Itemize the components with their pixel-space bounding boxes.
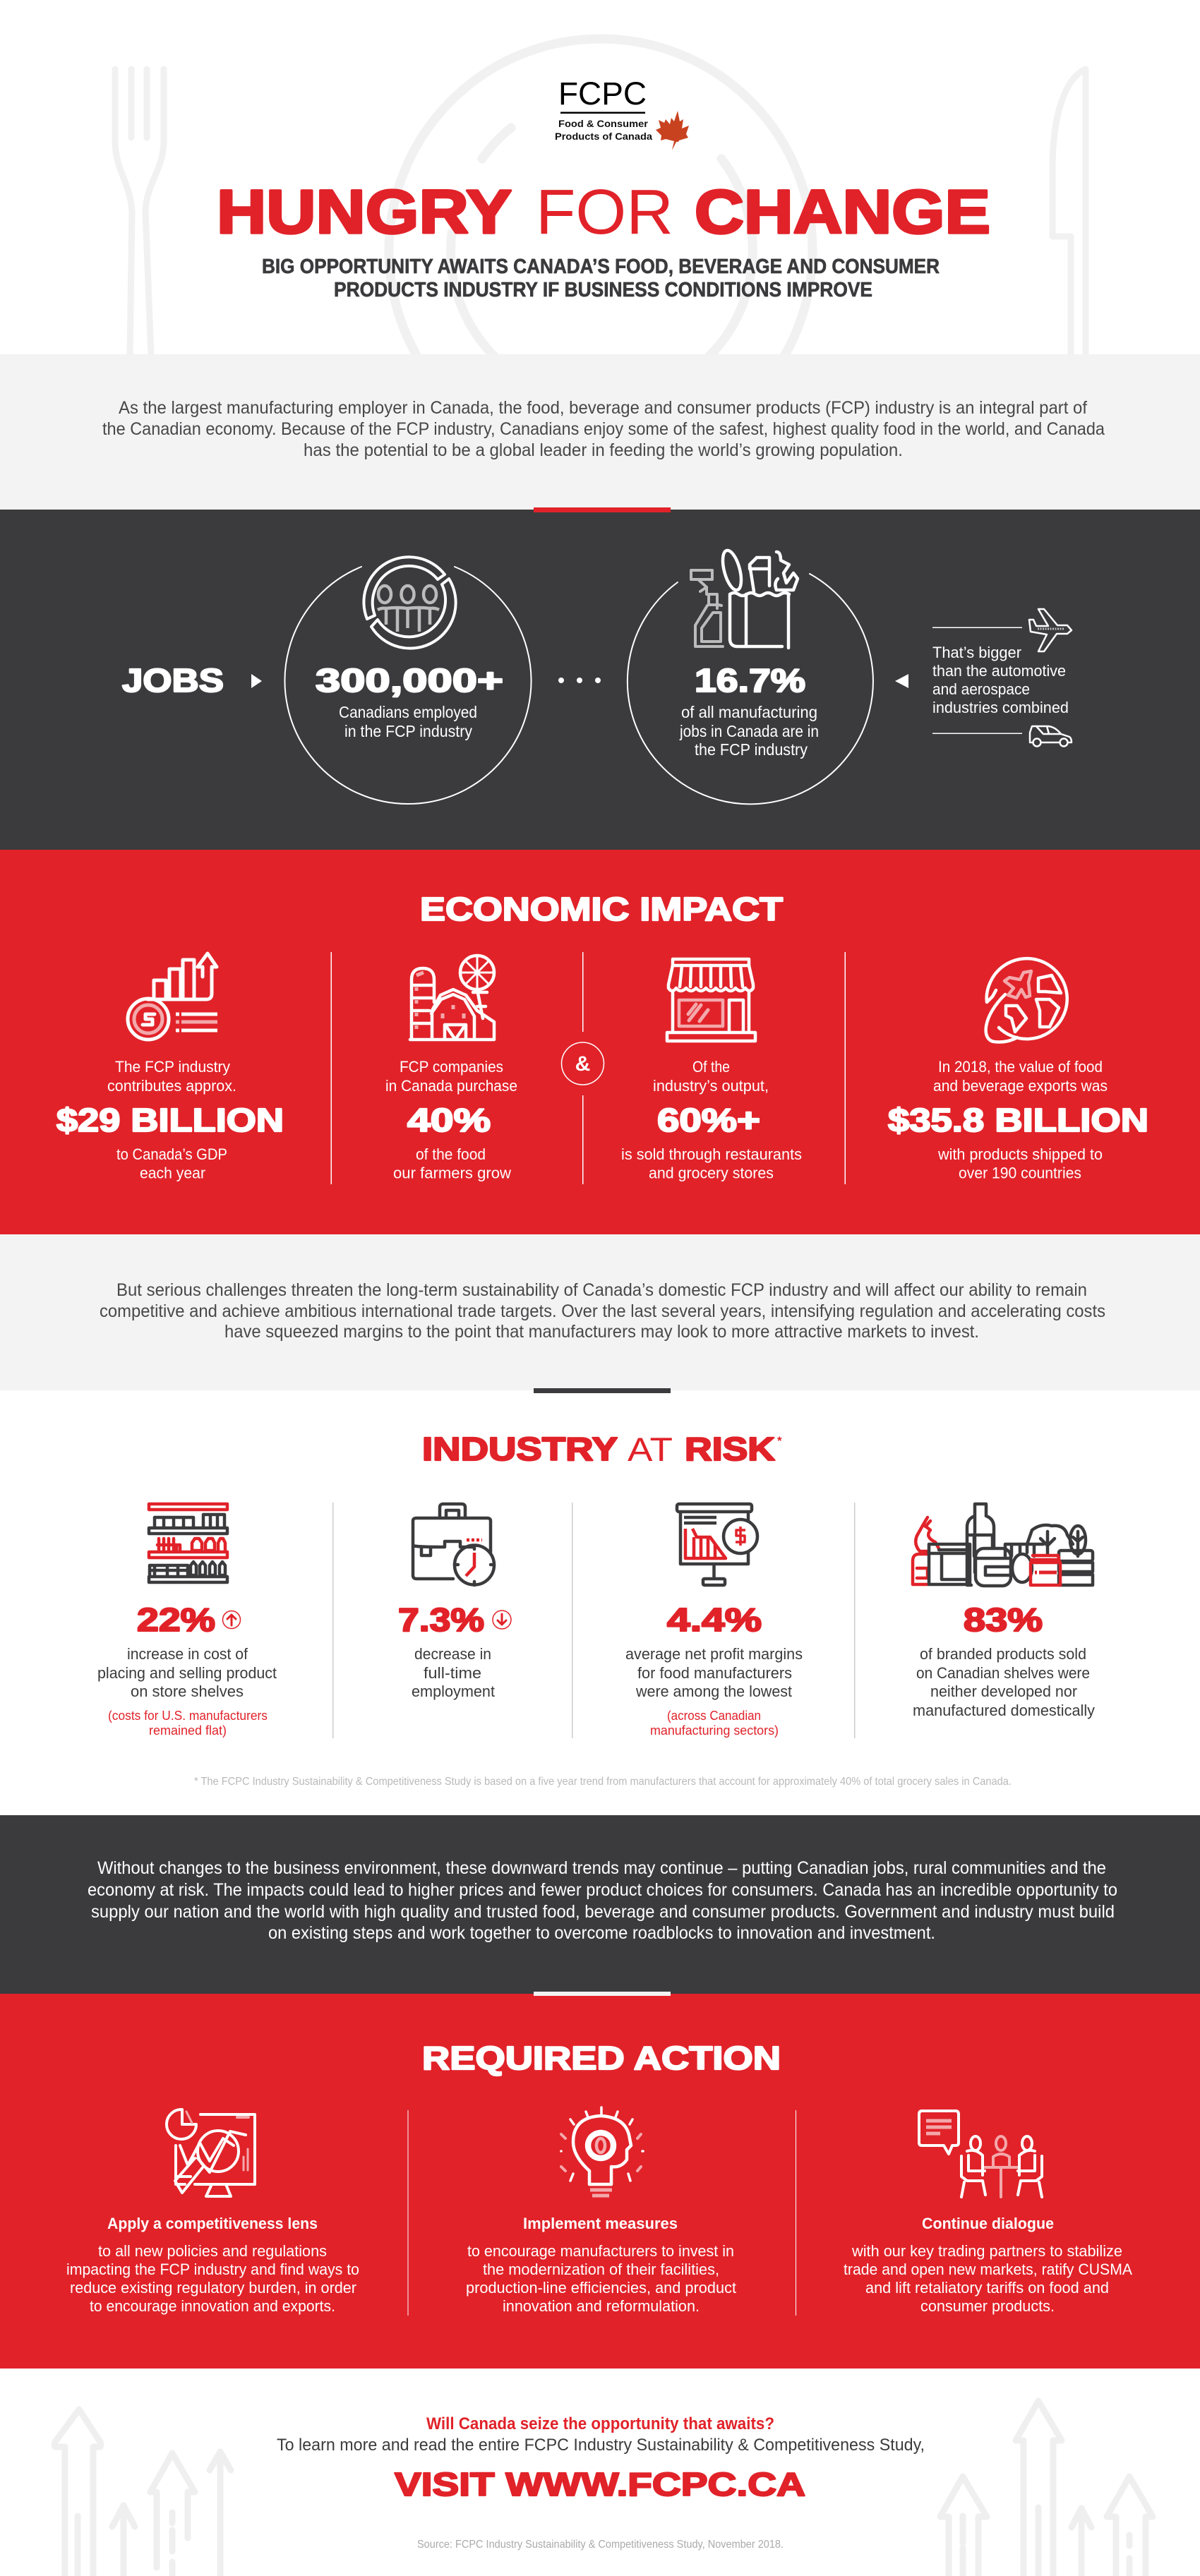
action: continue dialogue: and lift retaliatory tariffs on food and: [865, 2279, 1109, 2297]
growth arrows right: [940, 2401, 1153, 2576]
fork illustration: [115, 69, 164, 354]
title: HUNGRY: [217, 178, 512, 246]
logo: FCPC: [555, 76, 689, 150]
stat: 60%+: Of the: [692, 1058, 730, 1076]
call to action: [277, 2414, 925, 2503]
icon: grocery bag: [719, 548, 798, 648]
stat: 40%: our farmers grow: [393, 1164, 511, 1181]
subtitle: BIG OPPORTUNITY AWAITS CANADA’S FOOD, BEVERAGE AND CONSUMER: [262, 255, 940, 278]
icon: airplane: [1029, 609, 1072, 651]
stat: $29 billion: The FCP industry: [115, 1058, 230, 1076]
action: competitiveness lens: to encourage innovation and exports.: [90, 2297, 335, 2315]
stat: 7.3%: full-time: [424, 1664, 481, 1682]
heading: RISK: [685, 1431, 775, 1467]
action: continue dialogue: with our key trading partners to stabilize: [851, 2242, 1122, 2260]
call to action: To learn more and read the entire FCPC Industry Sustainability & Competitiveness Study,: [277, 2436, 925, 2455]
challenges text: have squeezed margins to the point that manufacturers may look to more attractive markets to invest.: [224, 1322, 979, 1342]
stat: 7.3%: employment: [412, 1683, 495, 1700]
knife illustration: [1052, 69, 1086, 354]
intro text: As the largest manufacturing employer in Canada, the food, beverage and consumer products (FCP) industry is an integral part of: [119, 398, 1087, 418]
stat: 16.7%: jobs in Canada are in: [679, 722, 819, 740]
stat: 4.4%: were among the lowest: [635, 1683, 792, 1700]
icon: store shelves: [149, 1504, 227, 1582]
stat: $35.8 billion: with products shipped to: [937, 1145, 1103, 1163]
intro text: [102, 398, 1105, 460]
growth arrows left: [54, 2409, 231, 2576]
stat: 83%: 83%: [964, 1601, 1043, 1638]
stat: 7.3%: decrease in: [414, 1645, 491, 1663]
stat: 60%+: 60%+: [657, 1102, 760, 1138]
panel: economic impact: [0, 850, 1200, 1234]
challenges text: But serious challenges threaten the long-term sustainability of Canada’s domestic FCP industry and will affect our ability to remain: [116, 1280, 1087, 1300]
stat: 83%: on Canadian shelves were: [916, 1664, 1090, 1682]
stat: 16.7%: [679, 662, 819, 759]
icon: barn and windmill: [410, 956, 494, 1040]
action: continue dialogue: [844, 2215, 1132, 2315]
icon: car: [1030, 726, 1072, 747]
panel: jobs: [0, 507, 1200, 850]
action: competitiveness lens: Apply a competitiveness lens: [107, 2215, 318, 2232]
stat: $29 billion: contributes approx.: [107, 1077, 236, 1095]
panel: call to change: [0, 1815, 1200, 1994]
stat: 83%: neither developed nor: [930, 1683, 1077, 1700]
call to action: Will Canada seize the opportunity that awaits?: [426, 2414, 774, 2433]
action: continue dialogue: Continue dialogue: [922, 2215, 1054, 2232]
action: competitiveness lens: reduce existing regulatory burden, in order: [70, 2279, 356, 2297]
stat: 16.7%: 16.7%: [695, 662, 805, 699]
stat: 300,000+: in the FCP industry: [344, 722, 472, 740]
icon: presentation board: [677, 1504, 757, 1585]
stat: 60%+: is sold through restaurants: [621, 1145, 802, 1163]
call to action: VISIT WWW.FCPC.CA: [395, 2466, 805, 2503]
heading: AT: [628, 1431, 673, 1468]
arrow: right: [251, 674, 262, 688]
stat: 22%: placing and selling product: [97, 1664, 277, 1682]
stat: 4.4%: 4.4%: [667, 1601, 762, 1638]
stat: 40%: [385, 1058, 517, 1181]
stat: 16.7%: of all manufacturing: [681, 703, 817, 721]
title: FOR: [536, 177, 673, 248]
panel: challenges: [0, 1234, 1200, 1390]
stat: $29 billion: [56, 1058, 284, 1181]
action: competitiveness lens: [66, 2215, 359, 2315]
arrow: left: [895, 674, 908, 688]
plate background illustration: [389, 39, 812, 462]
stat: $35.8 billion: $35.8 BILLION: [888, 1102, 1148, 1138]
call to change text: economy at risk. The impacts could lead to higher prices and fewer product choices for consumers. Canada has an incredible opportunity to: [88, 1880, 1117, 1900]
stat: 300,000+: Canadians employed: [339, 703, 477, 721]
panel: required action: [0, 1992, 1200, 2369]
action: implement measures: [466, 2215, 736, 2315]
circle: 300,000 employed: [285, 567, 532, 804]
source note: Source: FCPC Industry Sustainability & Competitiveness Study, November 2018.: [417, 2539, 784, 2551]
comparison callout: and aerospace: [932, 680, 1030, 698]
stat: 22%: 22%: [137, 1601, 215, 1638]
icon: grocery products: [913, 1504, 1093, 1586]
icon: lightbulb with gear: [561, 2107, 643, 2196]
icon: chart and coin: [128, 953, 217, 1040]
icon: spray bottle: [691, 570, 723, 646]
stat: 22%: increase in cost of: [127, 1645, 248, 1663]
ampersand badge: &: [575, 1052, 590, 1076]
call to change text: supply our nation and the world with high quality and trusted food, beverage and consumer products. Government and industry must build: [91, 1902, 1115, 1922]
stat: 7.3%: 7.3%: [398, 1601, 484, 1638]
stat: 40%: 40%: [407, 1102, 491, 1138]
stat: $29 billion: each year: [140, 1164, 205, 1181]
call to change text: [88, 1858, 1117, 1943]
title: [217, 177, 990, 248]
icon: analysis monitor: [167, 2109, 255, 2196]
stat: 4.4%: (across Canadian: [667, 1709, 761, 1723]
action: competitiveness lens: to all new policies and regulations: [98, 2242, 327, 2260]
comparison callout: than the automotive: [932, 662, 1066, 680]
stat: 22%: [97, 1601, 277, 1738]
stat: 22%: (costs for U.S. manufacturers: [108, 1709, 268, 1723]
stat: 16.7%: the FCP industry: [695, 740, 808, 759]
icon: dialogue table: [919, 2111, 1042, 2197]
stat: 22%: remained flat): [149, 1723, 227, 1738]
icon: down arrow: [493, 1611, 511, 1629]
heading: [422, 1431, 782, 1468]
intro text: has the potential to be a global leader in feeding the world’s growing population.: [304, 440, 903, 460]
action: continue dialogue: trade and open new markets, ratify CUSMA: [844, 2261, 1132, 2278]
panel: introduction: [0, 354, 1200, 510]
heading: INDUSTRY: [422, 1431, 618, 1467]
stat: 4.4%: average net profit margins: [625, 1645, 803, 1663]
jobs heading: JOBS: [122, 662, 224, 699]
footnote: * The FCPC Industry Sustainability & Competitiveness Study is based on a five year trend from manufacturers that account for approximately 40% of total grocery sales in Canada.: [194, 1776, 1012, 1788]
action: implement measures: to encourage manufacturers to invest in: [467, 2242, 734, 2260]
stat: $29 billion: $29 BILLION: [56, 1102, 284, 1138]
comparison callout: [932, 627, 1069, 734]
panel: footer: [54, 2401, 1153, 2576]
stat: 83%: [913, 1601, 1095, 1719]
call to change text: on existing steps and work together to overcome roadblocks to innovation and investment.: [268, 1923, 935, 1943]
connector dots: [558, 678, 601, 683]
logo: FCPC: Food & Consumer: [558, 118, 649, 129]
challenges text: competitive and achieve ambitious international trade targets. Over the last several years, intensifying regulation and accelerating costs: [100, 1301, 1105, 1321]
stat: 40%: of the food: [416, 1145, 486, 1163]
stat: $35.8 billion: and beverage exports was: [933, 1077, 1108, 1095]
action: implement measures: Implement measures: [523, 2215, 678, 2232]
stat: 83%: of branded products sold: [920, 1645, 1086, 1663]
ampersand badge: [562, 1042, 604, 1085]
subtitle: [262, 255, 940, 301]
stat: $35.8 billion: over 190 countries: [959, 1164, 1081, 1181]
call to change text: Without changes to the business environment, these downward trends may continue – putting Canadian jobs, rural communities and the: [97, 1858, 1106, 1878]
title: CHANGE: [695, 178, 990, 246]
circle: 16.7%: [628, 574, 873, 804]
stat: 40%: in Canada purchase: [385, 1077, 517, 1095]
challenges text: [100, 1280, 1105, 1342]
panel: header: [0, 0, 1200, 462]
comparison callout: industries combined: [932, 699, 1069, 716]
stat: 300,000+: 300,000+: [316, 662, 503, 699]
stat: 4.4%: [625, 1601, 803, 1738]
heading: *: [777, 1434, 782, 1448]
stat: 60%+: [621, 1058, 802, 1181]
action: continue dialogue: consumer products.: [920, 2297, 1055, 2315]
panel: industry at risk: [0, 1388, 1200, 1815]
stat: 83%: manufactured domestically: [913, 1702, 1095, 1719]
stat: 7.3%: [398, 1601, 495, 1700]
icon: maple leaf: [656, 111, 689, 150]
icon: people ring: [364, 557, 456, 649]
stat: 4.4%: for food manufacturers: [637, 1664, 792, 1682]
intro text: the Canadian economy. Because of the FCP industry, Canadians enjoy some of the safest, highest quality food in the world, and Canada: [102, 419, 1105, 439]
heading: ECONOMIC IMPACT: [420, 891, 783, 927]
subtitle: PRODUCTS INDUSTRY IF BUSINESS CONDITIONS IMPROVE: [334, 279, 872, 301]
action: competitiveness lens: impacting the FCP industry and find ways to: [66, 2261, 359, 2278]
action: implement measures: the modernization of their facilities,: [483, 2261, 719, 2278]
icon: storefront: [667, 959, 755, 1041]
action: implement measures: innovation and reformulation.: [503, 2297, 700, 2315]
stat: $29 billion: to Canada’s GDP: [116, 1145, 227, 1163]
logo: FCPC: Products of Canada: [555, 131, 652, 142]
icon: briefcase and clock: [413, 1504, 494, 1585]
stat: $35.8 billion: In 2018, the value of food: [938, 1058, 1103, 1076]
comparison callout: That’s bigger: [932, 644, 1021, 661]
stat: 60%+: industry’s output,: [653, 1077, 769, 1095]
stat: $35.8 billion: [888, 1058, 1148, 1181]
heading: REQUIRED ACTION: [422, 2040, 781, 2076]
stat: 60%+: and grocery stores: [649, 1164, 774, 1181]
logo: FCPC: FCPC: [558, 76, 647, 112]
stat: 40%: FCP companies: [400, 1058, 503, 1076]
stat: 22%: on store shelves: [131, 1683, 244, 1700]
stat: 4.4%: manufacturing sectors): [650, 1723, 779, 1738]
action: implement measures: production-line efficiencies, and product: [466, 2279, 736, 2297]
icon: globe and plane: [986, 958, 1067, 1042]
stat: 300,000+: [316, 662, 503, 740]
icon: up arrow: [223, 1611, 240, 1629]
